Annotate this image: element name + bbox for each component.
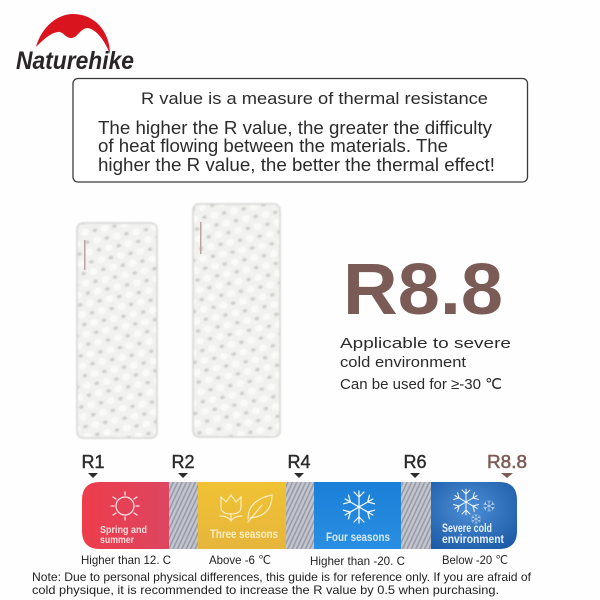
text block: explanation: higher the R value, the better the thermal effect! [98,155,495,175]
marker R2: R2 [171,452,195,472]
marker R8.8: R8.8 [487,452,527,472]
text block: explanation [98,118,495,175]
hatched gaps [165,482,435,549]
temperature: R4: Higher than -20. C [310,554,405,568]
note: Note: Due to personal physical differences, this guide is for reference only. If you are afraid of [32,570,532,584]
temperature: R2: Above -6 ℃ [209,553,271,567]
mat brand label [84,240,86,270]
temperature labels [81,553,508,568]
segment: spring and summer [82,482,169,549]
big R value: R8.8: R8.8 [343,250,503,330]
temperature: R6: Below -20 ℃ [442,553,508,567]
logo wordmark: Naturehike [16,47,134,75]
icon: tulip and leaf [220,495,272,522]
marker R6: R6 [403,452,427,472]
segment label: Spring and [100,524,147,536]
text block: applicability: Can be used for ≥-30 ℃ [340,376,502,393]
text block: applicability [340,335,511,393]
icon: snowflakes [453,489,495,524]
text block: applicability: Applicable to severe [340,335,511,352]
text block: explanation: of heat flowing between the materials. The [98,136,448,156]
segment: three seasons [198,482,286,549]
note: cold physique, it is recommended to increase the R value by 0.5 when purchasing. [32,583,499,597]
mat brand label [200,222,202,254]
segment label: Three seasons [210,529,278,541]
segment label: Four seasons [326,532,390,544]
image: large sleeping mat [193,204,280,437]
marker R4: R4 [287,452,311,472]
segment label: environment [442,534,504,546]
segment: severe cold environment [431,482,517,549]
marker R1: R1 [81,452,105,472]
segment label: Severe cold [442,523,492,535]
segment label [100,524,147,546]
text block: explanation: The higher the R value, the greater the difficulty [98,118,492,138]
icon: snowflake [343,491,375,523]
scale labels and markers [81,452,527,478]
segment: four seasons [314,482,401,549]
icon: sun [111,492,139,520]
segment label: summer [100,534,134,546]
temperature: R1: Higher than 12. C [81,553,171,567]
image: small sleeping mat [77,223,157,438]
scale bar [82,482,517,549]
segment label [442,523,504,546]
text block: applicability: cold environment [340,354,467,371]
heading: R value definition: R value is a measure of thermal resistance [141,89,488,108]
note [32,570,532,597]
logo: Naturehike [16,14,134,75]
icon: red mountain arc [36,14,110,54]
panel: R value definition [73,78,528,182]
